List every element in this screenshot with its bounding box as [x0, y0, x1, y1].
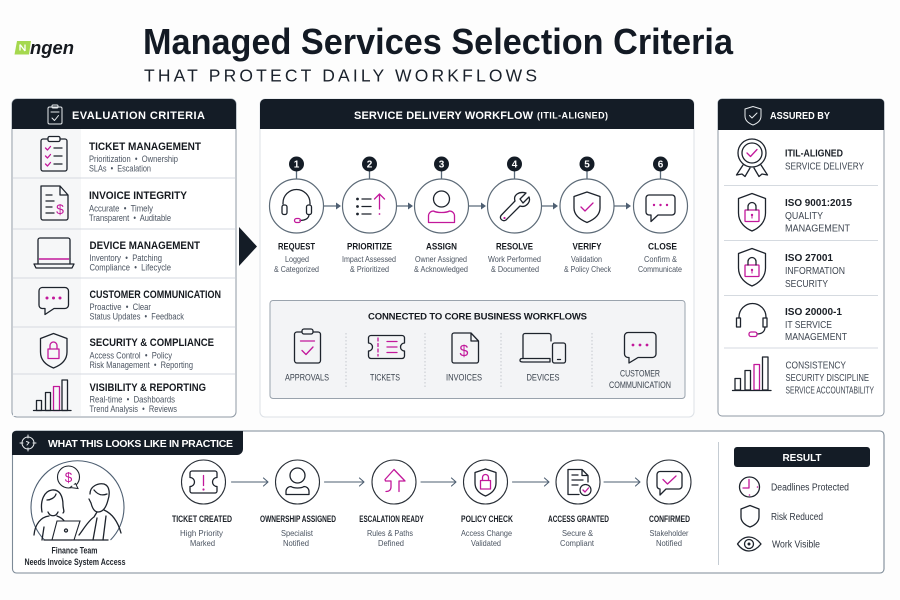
row: security and compliance: SECURITY & COMPLIANCE — [90, 337, 214, 349]
item: ISO 9001:2015: ISO 9001:2015 — [785, 198, 852, 209]
illustration: finance team — [24, 461, 126, 567]
item: approvals — [285, 329, 329, 382]
panel: connected to core business workflows — [270, 300, 685, 398]
step: access granted: Secure & — [562, 528, 593, 538]
item: ISO 27001: INFORMATION — [785, 266, 845, 277]
step: ownership assigned: Notified — [283, 538, 309, 548]
item: ISO 27001: SECURITY — [785, 279, 828, 290]
panel: service delivery workflow — [260, 99, 694, 417]
item: devices — [520, 334, 566, 382]
step 5: verify: Validation — [571, 254, 602, 264]
panel: assured by — [718, 99, 884, 416]
step: policy check: Validated — [471, 538, 501, 548]
row: visibility and reporting: Trend Analysis • Reviews — [90, 404, 177, 414]
item: ISO 27001: ISO 27001 — [785, 253, 833, 264]
step 3: assign: & Acknowledged — [414, 264, 468, 274]
step: escalation ready: Defined — [378, 538, 404, 548]
item: devices: DEVICES — [526, 372, 560, 382]
illustration: finance team: $ — [65, 470, 73, 485]
row: ticket management: TICKET MANAGEMENT — [89, 141, 201, 153]
item: ISO 20000-1 — [736, 304, 847, 343]
row: device management: DEVICE MANAGEMENT — [90, 240, 200, 252]
step 3: assign: 3 — [439, 160, 445, 170]
item: tickets: TICKETS — [370, 372, 400, 382]
step: ticket created: High Priority — [180, 528, 224, 538]
row: customer communication: Status Updates • Feedback — [90, 312, 184, 322]
step: policy check: Access Change — [461, 528, 512, 538]
arrow: practice connectors — [232, 478, 640, 486]
step: access granted — [548, 460, 609, 548]
illustration: finance team: Needs Invoice System Access — [24, 557, 126, 567]
item: ISO 9001:2015: QUALITY — [785, 211, 823, 222]
step: policy check — [461, 460, 513, 548]
step: policy check: POLICY CHECK — [461, 514, 513, 525]
step: access granted: Compliant — [560, 538, 595, 548]
header: assured by — [718, 99, 884, 130]
panel: evaluation criteria — [12, 99, 236, 417]
step 2: prioritize: PRIORITIZE — [347, 242, 392, 252]
step: confirmed: Notified — [656, 538, 682, 548]
step: ownership assigned: OWNERSHIP ASSIGNED — [260, 514, 336, 525]
item: ITIL-aligned: SERVICE DELIVERY — [785, 162, 864, 172]
row: ticket management: SLAs • Escalation — [89, 164, 151, 174]
item: invoices — [446, 333, 482, 382]
row: security and compliance: Access Control • Policy — [90, 350, 172, 360]
row: ticket management: Prioritization • Ownership — [89, 154, 178, 164]
item: ITIL-aligned — [736, 139, 864, 176]
item: customer communication: COMMUNICATION — [609, 380, 671, 390]
step 6: close — [634, 156, 688, 274]
step 1: request: Logged — [285, 254, 309, 264]
row: invoice integrity — [41, 186, 188, 223]
panel: connected to core business workflows: CONNECTED TO CORE BUSINESS WORKFLOWS — [368, 312, 587, 322]
logo: ngen: ngen — [30, 38, 74, 58]
row: visibility and reporting: VISIBILITY & REPORTING — [90, 382, 206, 394]
title: Managed Services Selection Criteria — [143, 21, 734, 62]
step 2: prioritize: 2 — [367, 160, 373, 170]
step: ticket created — [172, 460, 232, 548]
item: consistency — [732, 357, 874, 396]
item: ISO 9001:2015: MANAGEMENT — [785, 224, 850, 234]
item: invoices: $ — [460, 343, 469, 360]
step 6: close: 6 — [658, 160, 664, 170]
header: evaluation criteria: EVALUATION CRITERIA — [72, 110, 205, 122]
step: ticket created: Marked — [190, 538, 215, 548]
step: confirmed: Stakeholder — [650, 528, 689, 538]
item: tickets — [368, 336, 404, 382]
header: service delivery workflow: SERVICE DELIVERY WORKFLOW — [354, 110, 534, 122]
step 4: resolve: Work Performed — [488, 254, 541, 264]
step: access granted: ACCESS GRANTED — [548, 514, 609, 525]
header: service delivery workflow — [260, 99, 694, 129]
subtitle: THAT PROTECT DAILY WORKFLOWS — [144, 66, 537, 86]
arrow: step connectors — [324, 202, 631, 210]
item: customer communication — [609, 332, 671, 390]
row: device management: Compliance • Lifecycle — [90, 262, 171, 272]
result: deadlines protected: Deadlines Protected — [771, 482, 849, 494]
item: ISO 20000-1: ISO 20000-1 — [785, 307, 842, 318]
step 3: assign: Owner Assigned — [415, 254, 467, 264]
row: invoice integrity: Accurate • Timely — [89, 204, 153, 214]
row: invoice integrity: Transparent • Auditable — [89, 213, 171, 223]
step 6: close: CLOSE — [648, 242, 678, 252]
result box: RESULT — [782, 453, 822, 464]
step: escalation ready: ESCALATION READY — [359, 514, 424, 525]
arrow: criteria to workflow — [239, 227, 257, 266]
step: ownership assigned: Specialist — [281, 528, 314, 538]
step 1: request: & Categorized — [274, 264, 319, 274]
row: ticket management — [41, 136, 201, 174]
row: invoice integrity: $ — [56, 201, 64, 217]
item: ISO 27001 — [738, 248, 845, 290]
step 5: verify: 5 — [584, 160, 590, 170]
step 1: request — [270, 156, 324, 274]
step 5: verify: & Policy Check — [564, 264, 612, 274]
illustration: finance team: Finance Team — [52, 546, 98, 556]
panel: what this looks like in practice — [12, 431, 884, 573]
item: customer communication: CUSTOMER — [620, 368, 660, 378]
header tab: WHAT THIS LOOKS LIKE IN PRACTICE — [48, 438, 233, 450]
row: customer communication: Proactive • Clear — [90, 302, 151, 312]
step: escalation ready: Rules & Paths — [367, 528, 413, 538]
row: device management: Inventory • Patching — [90, 253, 162, 263]
step 4: resolve: & Documented — [491, 264, 539, 274]
result: work visible: Work Visible — [772, 540, 820, 550]
step 5: verify — [560, 156, 614, 274]
item: approvals: APPROVALS — [285, 372, 329, 382]
step 2: prioritize: & Prioritized — [350, 264, 389, 274]
step 2: prioritize — [342, 156, 396, 274]
step: confirmed: CONFIRMED — [649, 514, 690, 525]
header: assured by: ASSURED BY — [770, 111, 830, 122]
item: invoices: INVOICES — [446, 372, 482, 382]
step 6: close: Communicate — [638, 264, 682, 274]
result: risk reduced: Risk Reduced — [771, 512, 823, 523]
row: invoice integrity: INVOICE INTEGRITY — [89, 190, 188, 202]
result box — [734, 447, 870, 551]
row: security and compliance: Risk Management • Reporting — [90, 360, 193, 370]
step 1: request: 1 — [294, 160, 300, 170]
item: ISO 20000-1: MANAGEMENT — [785, 332, 847, 343]
header: evaluation criteria — [48, 105, 205, 124]
step 4: resolve: 4 — [512, 160, 518, 170]
step 3: assign — [414, 156, 468, 274]
row: visibility and reporting — [34, 380, 206, 414]
header tab — [12, 431, 243, 455]
row: security and compliance — [40, 334, 214, 370]
step: ticket created: TICKET CREATED — [172, 514, 232, 525]
item: consistency: CONSISTENCY — [786, 360, 846, 372]
row: visibility and reporting: Real-time • Dashboards — [90, 394, 175, 404]
step 1: request: REQUEST — [278, 242, 315, 252]
step 3: assign: ASSIGN — [426, 242, 457, 252]
item: ISO 20000-1: IT SERVICE — [785, 320, 832, 331]
step 6: close: Confirm & — [644, 254, 677, 264]
row: customer communication — [39, 288, 221, 322]
step 2: prioritize: Impact Assessed — [342, 254, 396, 264]
step: escalation ready — [359, 460, 424, 548]
row: customer communication: CUSTOMER COMMUNICATION — [90, 289, 221, 301]
step: confirmed — [647, 460, 691, 548]
step 4: resolve: RESOLVE — [496, 242, 533, 252]
item: ITIL-aligned: ITIL-ALIGNED — [785, 148, 843, 160]
step 5: verify: VERIFY — [572, 242, 602, 252]
row: device management — [34, 238, 200, 272]
step 4: resolve — [488, 156, 542, 274]
item: ISO 9001:2015 — [738, 194, 852, 234]
step: ownership assigned — [260, 460, 336, 548]
item: consistency: SECURITY DISCIPLINE — [786, 373, 869, 384]
header: service delivery workflow: (ITIL-ALIGNED) — [537, 110, 608, 120]
